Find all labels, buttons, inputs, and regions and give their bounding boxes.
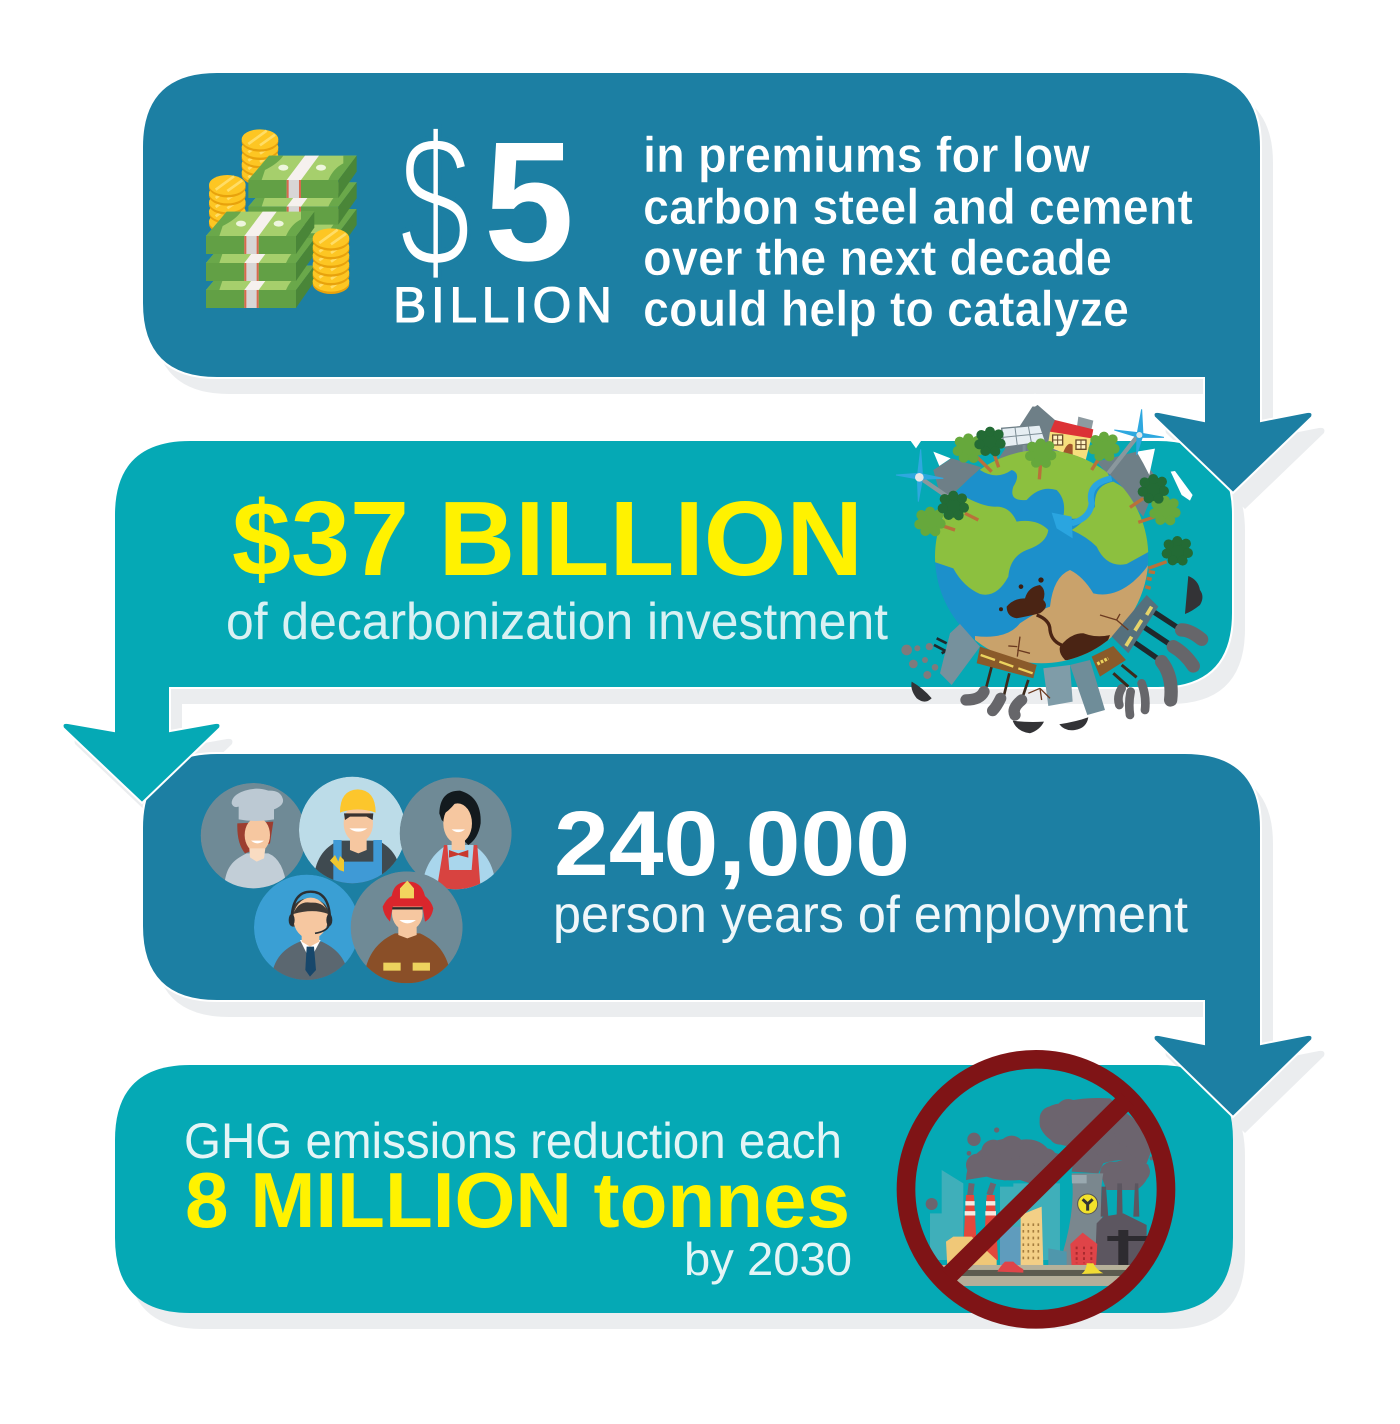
heading: 8 million tonnes: 8 MILLION tonnes — [185, 1156, 850, 1244]
text: person years of employment: person years of employment — [553, 886, 1189, 944]
polluted industry — [901, 576, 1202, 733]
text: premiums description: in premiums for low — [643, 127, 1090, 183]
icon: money and coin stacks — [206, 129, 357, 308]
worker: firefighter — [351, 871, 463, 983]
no-entry ring and slash — [906, 1059, 1166, 1319]
house — [1048, 417, 1093, 462]
solar panel — [1002, 425, 1046, 454]
worker: waitress — [400, 777, 512, 890]
wind turbines — [896, 409, 1164, 502]
blue building — [1000, 1226, 1021, 1265]
panel: decarbonization investment with arrow — [63, 440, 1233, 803]
icon: workers in circles — [201, 777, 512, 983]
text: by 2030: by 2030 — [684, 1233, 852, 1285]
low beige building — [946, 1237, 997, 1267]
faded skyline — [930, 1170, 1060, 1260]
text: premiums description: carbon steel and cement — [643, 179, 1193, 235]
mountains — [933, 403, 1158, 517]
red house — [1070, 1233, 1097, 1267]
panel: GHG emissions reduction — [115, 1065, 1233, 1313]
red and white chimneys — [963, 1195, 998, 1260]
panel shadows — [75, 88, 1324, 1329]
smoke clouds — [926, 1098, 1154, 1210]
dark plant with chimneys — [1095, 1183, 1147, 1267]
panel: premiums with arrow — [142, 72, 1312, 493]
cars — [997, 1262, 1023, 1273]
heading: $37 billion: $37 BILLION — [232, 480, 863, 598]
worker: chef — [201, 783, 306, 893]
text: of decarbonization investment: of decarbonization investment — [226, 593, 889, 651]
worker: call centre agent — [254, 875, 359, 983]
text: premiums description: could help to catalyze — [643, 281, 1129, 337]
cooling tower — [1063, 1173, 1104, 1265]
worker: construction — [299, 776, 403, 884]
globe — [933, 440, 1152, 670]
text: premiums description — [643, 127, 1193, 337]
big number: $5 billion: $ — [399, 96, 471, 308]
trees — [940, 453, 1167, 588]
big number: 240,000: 240,000 — [554, 793, 910, 895]
icon: planet half green half polluted — [896, 393, 1202, 733]
big number: $5 billion: 5 — [484, 107, 574, 297]
yellow building — [1021, 1207, 1043, 1267]
panel: person years of employment with arrow — [142, 753, 1312, 1117]
road — [942, 1265, 1130, 1270]
big number: $5 billion: BILLION — [393, 277, 612, 333]
text: premiums description: over the next decade — [643, 230, 1112, 286]
big number: $5 billion — [393, 96, 612, 333]
icon: prohibited polluting city — [906, 1059, 1166, 1319]
text: GHG emissions reduction each: GHG emissions reduction each — [184, 1113, 842, 1169]
